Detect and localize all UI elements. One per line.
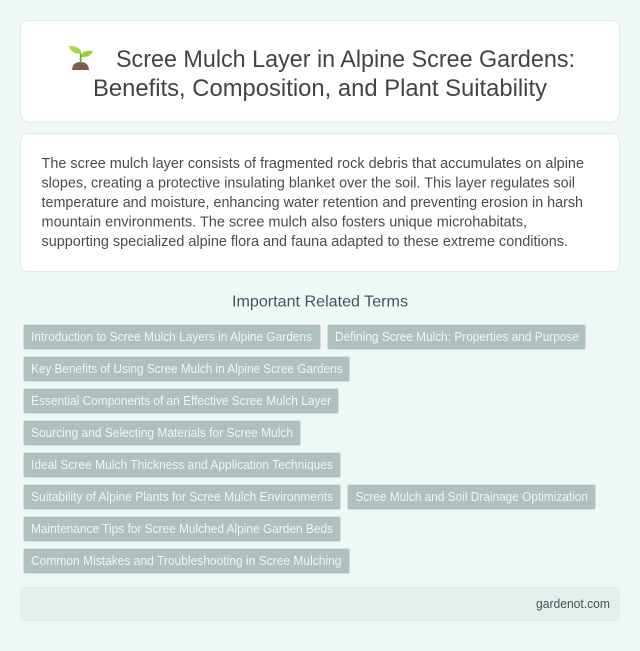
tag [328, 324, 586, 350]
description paragraph: slopes, creating a protective insulating blanket over the soil. This layer regulates soil [42, 174, 575, 192]
footer bar [20, 587, 620, 621]
description paragraph: mountain environments. The scree mulch also fosters unique microhabitats, [42, 214, 527, 230]
tag [24, 356, 350, 382]
tag [24, 324, 320, 350]
tag: Key Benefits of Using Scree Mulch in Alpine Scree Gardens [31, 361, 343, 376]
tag [24, 516, 340, 542]
tag [24, 388, 338, 414]
tag: Introduction to Scree Mulch Layers in Alpine Gardens [31, 329, 312, 344]
description paragraph: supporting specialized alpine flora and fauna adapted to these extreme conditions. [42, 233, 568, 250]
tag [24, 548, 350, 574]
tag [24, 420, 300, 446]
tag: Maintenance Tips for Scree Mulched Alpine Garden Beds [31, 521, 333, 536]
tag: Common Mistakes and Troubleshooting in Scree Mulching [31, 553, 342, 568]
tag: Ideal Scree Mulch Thickness and Application Techniques [31, 457, 333, 472]
tag [24, 452, 340, 478]
tag: Suitability of Alpine Plants for Scree Mulch Environments [31, 489, 333, 504]
panel: description card [20, 134, 620, 272]
title text: Scree Mulch Layer in Alpine Scree Gardens: [116, 46, 575, 73]
tag: Essential Components of an Effective Scree Mulch Layer [31, 393, 332, 408]
icon: seedling [69, 46, 93, 70]
description paragraph: The scree mulch layer consists of fragmented rock debris that accumulates on alpine [42, 155, 584, 172]
tag: Defining Scree Mulch: Properties and Purpose [335, 329, 579, 344]
title text line 2: Benefits, Composition, and Plant Suitability [93, 75, 548, 102]
description paragraph: temperature and moisture, enhancing water retention and preventing erosion in harsh [42, 194, 583, 211]
footer text: gardenot.com [536, 596, 610, 611]
panel: title card [20, 20, 620, 122]
tag: Sourcing and Selecting Materials for Scree Mulch [31, 425, 293, 440]
tag [348, 484, 596, 510]
description paragraph [42, 155, 584, 250]
tag: Scree Mulch and Soil Drainage Optimization [356, 489, 588, 504]
tag [24, 484, 340, 510]
heading: important related terms: Important Related Terms [232, 294, 408, 310]
tag list [24, 324, 596, 574]
